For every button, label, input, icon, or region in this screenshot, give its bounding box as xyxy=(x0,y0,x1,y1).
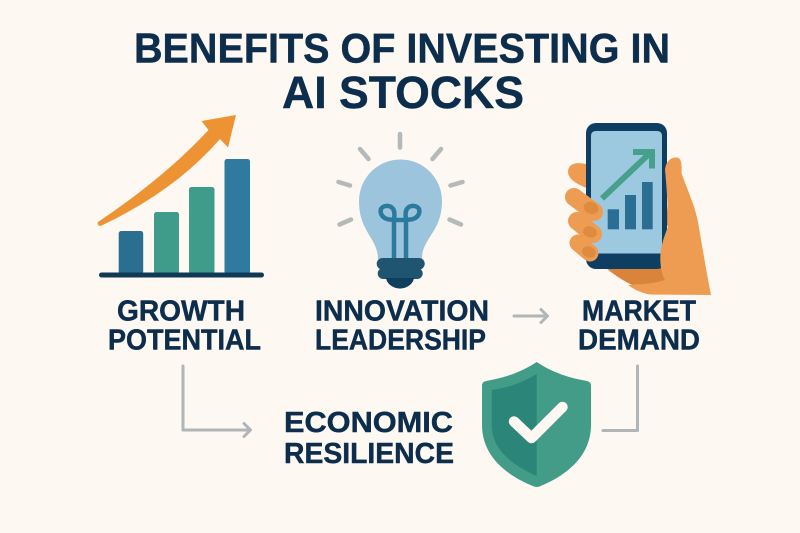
title xyxy=(134,24,670,118)
icon: light bulb xyxy=(338,134,462,288)
title: AI STOCKS xyxy=(282,67,524,118)
finger nails xyxy=(582,200,600,216)
shield inner shade xyxy=(492,374,537,476)
screen arrow xyxy=(602,152,652,198)
arrow: innovation to market xyxy=(514,310,548,322)
icon: hand holding phone xyxy=(568,123,711,295)
bar 3 xyxy=(189,187,214,274)
label: innovation leadership: LEADERSHIP xyxy=(315,324,486,356)
top finger xyxy=(568,163,592,190)
phone screen xyxy=(591,131,662,254)
screen bars xyxy=(608,182,653,229)
rays xyxy=(338,134,462,224)
arrow: growth to resilience xyxy=(183,366,250,436)
bulb glass xyxy=(359,159,442,259)
shield outer xyxy=(482,362,591,487)
phone body xyxy=(586,123,667,269)
arrow: orange growth xyxy=(98,115,236,226)
label: innovation leadership xyxy=(315,296,489,356)
label: growth potential: POTENTIAL xyxy=(108,324,261,356)
check mark xyxy=(514,407,562,438)
bulb base xyxy=(377,258,425,270)
label: market demand: DEMAND xyxy=(578,324,700,356)
fingers xyxy=(574,197,600,260)
label: market demand xyxy=(578,296,700,356)
label: economic resilience xyxy=(284,407,454,470)
bar 4 xyxy=(224,159,250,274)
title: BENEFITS OF INVESTING IN xyxy=(134,24,670,72)
label: growth potential: GROWTH xyxy=(117,296,245,328)
palm and thumb xyxy=(667,206,670,226)
icon: growth bar chart with arrow xyxy=(98,115,264,278)
filament xyxy=(381,206,419,258)
bar 1 xyxy=(119,231,143,274)
label: economic resilience: RESILIENCE xyxy=(284,438,454,470)
label: market demand: MARKET xyxy=(582,296,697,328)
label: economic resilience: ECONOMIC xyxy=(284,407,453,439)
connector: shield to market xyxy=(603,366,638,430)
bar 2 xyxy=(154,212,179,274)
baseline xyxy=(99,272,264,278)
icon: shield with check xyxy=(482,362,591,487)
hand back shadow xyxy=(600,262,668,285)
label: growth potential xyxy=(108,296,261,356)
label: innovation leadership: INNOVATION xyxy=(315,296,489,328)
